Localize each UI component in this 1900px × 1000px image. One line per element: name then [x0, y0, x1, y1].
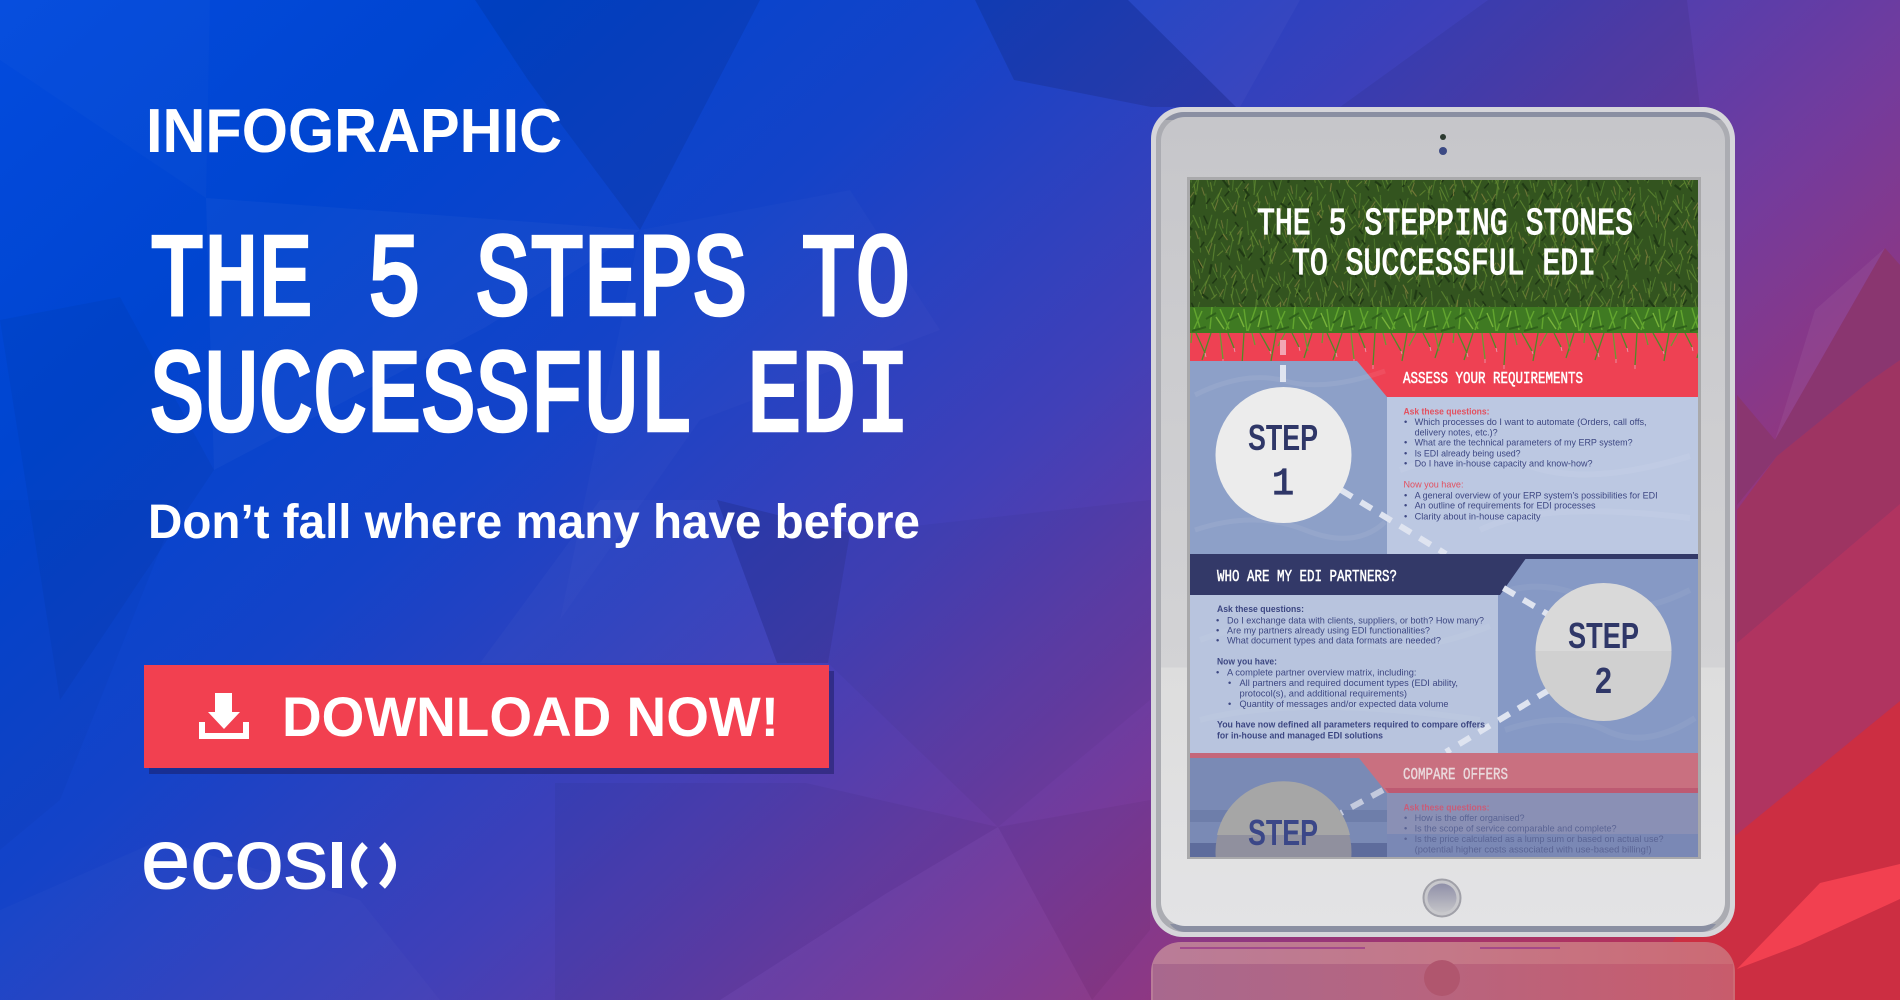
- text: step 2 checklist: Quantity of messages and/or expected data volume: [1240, 699, 1448, 709]
- text: step 1 checklist: Is EDI already being used?: [1415, 448, 1521, 458]
- heading: stepping stones: [1258, 208, 1632, 276]
- text: step 1 checklist: Do I have in-house capacity and know-how?: [1415, 459, 1593, 469]
- text: step 3 checklist: •: [1404, 813, 1407, 823]
- text: step 2 checklist: [1216, 604, 1485, 741]
- icon: download arrow: [199, 693, 249, 739]
- text: step 2 checklist: •: [1216, 636, 1219, 646]
- text: step 1 checklist: •: [1404, 448, 1407, 458]
- circle: step 3: [1216, 781, 1352, 857]
- heading: stepping stones: THE 5 STEPPING STONES: [1257, 203, 1633, 246]
- text: step 3 checklist: Ask these questions:: [1404, 803, 1490, 813]
- text: step 1 checklist: Ask these questions:: [1404, 406, 1490, 416]
- text: step 1 checklist: •: [1404, 438, 1407, 448]
- circle: step 2: STEP: [1568, 615, 1639, 656]
- heading: assess: ASSESS YOUR REQUIREMENTS: [1403, 370, 1583, 389]
- text: step 1 checklist: •: [1404, 501, 1407, 511]
- text: step 2 checklist: •: [1228, 699, 1231, 709]
- heading: partners: WHO ARE MY EDI PARTNERS?: [1217, 568, 1397, 587]
- screen: infographic preview: [1187, 177, 1701, 920]
- circle: step 3: STEP: [1248, 812, 1318, 853]
- text: step 2 checklist: Now you have:: [1217, 657, 1277, 667]
- text: step 2 checklist: You have now defined all parameters required to compare offers: [1217, 720, 1485, 730]
- text: step 2 checklist: A complete partner overview matrix, including:: [1227, 667, 1416, 677]
- circle: step 1: [1216, 387, 1352, 523]
- heading: stepping stones: TO SUCCESSFUL EDI: [1292, 243, 1596, 286]
- label: INFOGRAPHIC: INFOGRAPHIC: [146, 97, 562, 166]
- home button: [1424, 880, 1460, 916]
- text: step 2 checklist: Do I exchange data with clients, suppliers, or both? How many?: [1227, 615, 1484, 625]
- download button: [144, 665, 834, 774]
- title: The 5 Steps to Successful EDI: SUCCESSFUL EDI: [150, 334, 910, 466]
- text: step 1 checklist: Now you have:: [1404, 480, 1464, 490]
- title: The 5 Steps to Successful EDI: [150, 218, 910, 466]
- text: step 2 checklist: for in-house and managed EDI solutions: [1217, 731, 1383, 741]
- text: step 3 checklist: Is the price calculated as a lump sum or based on actual use?: [1415, 834, 1664, 844]
- tablet reflection: [1151, 942, 1735, 1000]
- text: step 2 checklist: Ask these questions:: [1217, 604, 1304, 614]
- circle: step 1: 1: [1272, 463, 1294, 506]
- text: step 3 checklist: Is the scope of service comparable and complete?: [1415, 824, 1617, 834]
- heading: compare offers: COMPARE OFFERS: [1403, 766, 1508, 785]
- camera: [1439, 134, 1447, 155]
- panel: step 3 (fading): [1190, 753, 1698, 857]
- text: step 2 checklist: •: [1216, 615, 1219, 625]
- circle: step 2: 2: [1595, 660, 1612, 701]
- logo: ecosio: ecos: [141, 812, 328, 906]
- title: The 5 Steps to Successful EDI: THE 5 STEPS TO: [150, 218, 910, 350]
- circle: step 1: STEP: [1248, 417, 1318, 458]
- panel: step 2: [1190, 554, 1698, 753]
- text: step 1 checklist: •: [1404, 417, 1407, 427]
- text: step 1 checklist: Clarity about in-house capacity: [1415, 511, 1541, 521]
- text: step 1 checklist: delivery notes, etc.)?: [1415, 427, 1498, 437]
- panel: step 1: [1190, 340, 1698, 554]
- text: step 2 checklist: •: [1216, 625, 1219, 635]
- text: step 1 checklist: •: [1404, 511, 1407, 521]
- grass header: [1190, 180, 1698, 397]
- text: step 1 checklist: What are the technical parameters of my ERP system?: [1415, 438, 1633, 448]
- text: step 2 checklist: All partners and required document types (EDI ability,: [1240, 678, 1458, 688]
- text: step 3 checklist: •: [1404, 824, 1407, 834]
- tablet: [1151, 107, 1735, 937]
- text: step 3 checklist: •: [1404, 834, 1407, 844]
- text: step 2 checklist: •: [1216, 667, 1219, 677]
- text: step 1 checklist: Which processes do I want to automate (Orders, call offs,: [1415, 417, 1647, 427]
- text: step 3 checklist: [1404, 803, 1664, 855]
- text: step 3 checklist: How is the offer organised?: [1415, 813, 1525, 823]
- text: step 1 checklist: •: [1404, 490, 1407, 500]
- circle: step 2: [1536, 583, 1672, 721]
- text: step 3 checklist: (potential higher costs associated with use-based billing!): [1415, 845, 1652, 855]
- text: step 2 checklist: Are my partners already using EDI functionalities?: [1227, 625, 1430, 635]
- text: step 1 checklist: •: [1404, 459, 1407, 469]
- download button: DOWNLOAD NOW!: [282, 685, 779, 748]
- text: step 1 checklist: A general overview of your ERP system’s possibilities for EDI: [1415, 490, 1658, 500]
- text: step 1 checklist: [1404, 406, 1658, 521]
- text: step 1 checklist: An outline of requirements for EDI processes: [1415, 501, 1596, 511]
- subtitle: Don’t fall where many have before: [148, 496, 920, 549]
- text: step 2 checklist: What document types and data formats are needed?: [1227, 636, 1441, 646]
- text: step 2 checklist: •: [1228, 678, 1231, 688]
- text: step 2 checklist: protocol(s), and additional requirements): [1240, 688, 1407, 698]
